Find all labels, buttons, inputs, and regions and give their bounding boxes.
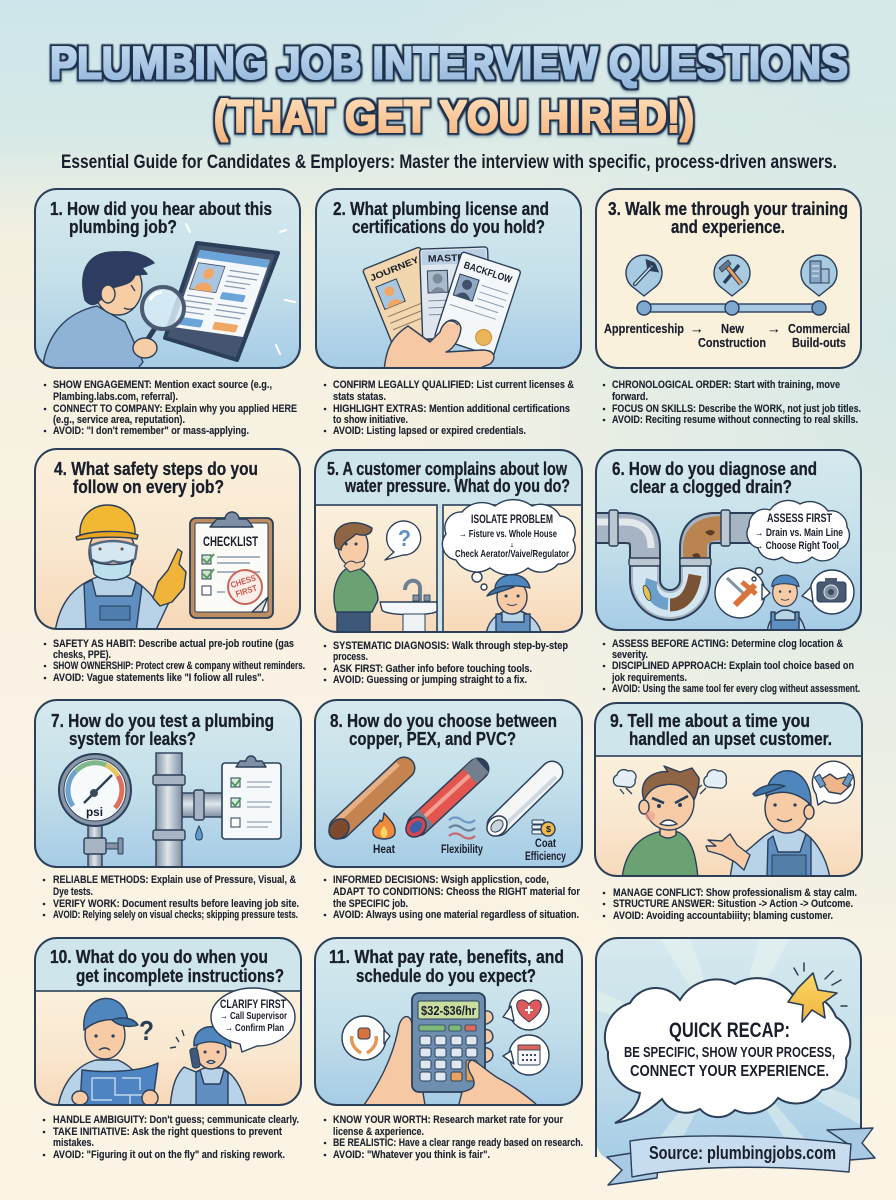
tips 7: RELIABLE METHODS: Explain use of Pressure, Visual, & bbox=[53, 874, 296, 886]
tips 2: stats statas. bbox=[333, 391, 386, 403]
icon: heat flame bbox=[373, 813, 395, 839]
icon: hammer and wrench bbox=[714, 255, 750, 296]
icon: copper pipe bbox=[325, 764, 404, 843]
thought cloud: isolate problem: ISOLATE PROBLEM bbox=[471, 512, 553, 526]
illustration: candidate with magnifier and tablet bbox=[42, 224, 295, 372]
recap message: BE SPECIFIC, SHOW YOUR PROCESS, bbox=[624, 1044, 835, 1061]
illustration: tee pipe with leak bbox=[153, 753, 224, 873]
tips 4: chesks, PPE). bbox=[53, 649, 111, 661]
heading 3 bbox=[608, 198, 848, 237]
tips 3 bbox=[603, 379, 861, 426]
panel 5: low water pressure bbox=[315, 450, 583, 686]
icon: camera bubble bbox=[802, 570, 854, 614]
icon: PVC pipe bbox=[483, 772, 556, 840]
tips 5: SYSTEMATIC DIAGNOSIS: Walk through step-by-step bbox=[333, 640, 568, 652]
thought cloud: isolate problem: Check Aerator/Vaive/Regulator bbox=[455, 549, 569, 560]
icon: coins bbox=[532, 820, 555, 836]
timeline labels: Build-outs bbox=[792, 335, 846, 350]
scene: confused customer at sink: ? bbox=[398, 525, 411, 551]
tips 7: AVOID: Relying selely on visual checks; skipping pressure tests. bbox=[53, 909, 298, 921]
heading 10 bbox=[50, 946, 284, 986]
icon: schedule calendar bubble bbox=[503, 1035, 549, 1075]
heading 7 bbox=[51, 710, 274, 749]
heading 5: 5. A customer complains about low bbox=[327, 458, 567, 479]
icon: coins: $ bbox=[546, 825, 552, 834]
heading 6 bbox=[612, 458, 817, 497]
heading 2: certifications do you hold? bbox=[352, 216, 545, 237]
tips 11: BE REALISTIC: Have a clear range ready based on research. bbox=[333, 1137, 583, 1149]
panel 12: quick recap bbox=[596, 938, 875, 1185]
illustration: p-trap pipe with clog bbox=[590, 510, 760, 605]
ribbon: source bbox=[607, 1128, 875, 1185]
illustration: hand holding calculator: $32-$36/hr bbox=[421, 1003, 476, 1018]
tips 4 bbox=[44, 638, 305, 684]
panel 7: leak testing bbox=[35, 700, 301, 921]
tips 6 bbox=[603, 638, 860, 695]
icon: checklist clipboard: CHESS bbox=[229, 572, 257, 590]
panel 3: training and experience timeline bbox=[596, 189, 861, 426]
speech bubble: clarify first: CLARIFY FIRST bbox=[220, 997, 286, 1011]
tips 4: SHOW OWNERSHIP: Protect crew & company witheut reminders. bbox=[53, 660, 305, 672]
figure: plumber bbox=[752, 568, 806, 634]
heading 6: clear a clogged drain? bbox=[630, 476, 792, 497]
heading 11: 11. What pay rate, benefits, and bbox=[329, 946, 564, 967]
heading 1 bbox=[50, 198, 272, 237]
heading 1: plumbing job? bbox=[69, 216, 177, 237]
figure: plumber on phone bbox=[170, 1027, 247, 1108]
panel 6: clogged drain bbox=[590, 450, 861, 695]
tips 1 bbox=[44, 379, 297, 437]
icons: anger puffs bbox=[613, 770, 726, 794]
heading 9: handled an upset customer. bbox=[629, 728, 832, 749]
thought cloud: assess first: → Choose Right Tool bbox=[755, 540, 839, 552]
title: (THAT GET YOU HIRED!) bbox=[214, 91, 694, 142]
tips 10: TAKE INITIATIVE: Ask the right questions to prevent bbox=[53, 1126, 282, 1138]
heading 1: 1. How did you hear about this bbox=[50, 198, 272, 219]
tips 1: AVOID: "I don't remember" or mass-applying. bbox=[53, 425, 249, 437]
tips 1: Plambing.labs.com, referral). bbox=[53, 391, 178, 403]
thought cloud: assess first: → Drain vs. Main Line bbox=[755, 527, 843, 539]
label: cost efficiency: Coat bbox=[535, 838, 556, 850]
heading 9: 9. Tell me about a time you bbox=[610, 710, 810, 731]
tips 8 bbox=[324, 874, 580, 921]
tips 7: Dye tests. bbox=[53, 886, 93, 898]
tips 6: severity. bbox=[612, 649, 648, 661]
tips 5: process. bbox=[333, 651, 368, 663]
heading 8: copper, PEX, and PVC? bbox=[349, 728, 516, 749]
heading 7: 7. How do you test a plumbing bbox=[51, 710, 274, 731]
recap heading: QUICK RECAP: bbox=[669, 1019, 790, 1042]
tips 11: KNOW YOUR WORTH: Research market rate for your bbox=[333, 1114, 563, 1126]
scene: confused customer at sink bbox=[315, 505, 437, 634]
heading 8: 8. How do you choose between bbox=[330, 710, 557, 731]
panel 4: safety steps bbox=[35, 449, 305, 684]
tips 3: forward. bbox=[612, 391, 648, 403]
illustration: hand holding license cards: BACKFLOW bbox=[462, 260, 514, 286]
heading 6: 6. How do you diagnose and bbox=[612, 458, 817, 479]
label: flexibility: Flexibility bbox=[441, 844, 483, 856]
label: heat: Heat bbox=[373, 844, 395, 856]
tips 6: jok requirements. bbox=[611, 672, 687, 684]
thought cloud: assess first: ASSESS FIRST bbox=[767, 511, 832, 525]
icon: star bbox=[788, 963, 847, 1022]
panel 11: pay rate and benefits bbox=[315, 938, 583, 1161]
timeline labels: Commercial bbox=[788, 321, 850, 336]
timeline chart bbox=[604, 255, 850, 350]
icon: buildings bbox=[801, 255, 837, 296]
thought cloud: isolate problem bbox=[442, 500, 575, 575]
timeline labels: New bbox=[721, 321, 745, 336]
icon: checklist clipboard bbox=[190, 512, 273, 618]
speech bubble: clarify first bbox=[211, 988, 295, 1052]
icon: benefits hands bubble bbox=[342, 1016, 390, 1060]
panel 9: upset customer bbox=[595, 703, 862, 922]
tips 9: AVOID: Avoiding accountabiiity; blaming customer. bbox=[613, 910, 833, 922]
illustration: hand holding calculator bbox=[362, 993, 540, 1108]
heading 4 bbox=[54, 458, 258, 497]
tips 10 bbox=[43, 1114, 299, 1161]
heading 10: get incomplete instructions? bbox=[76, 965, 284, 986]
heading 3: 3. Walk me through your training bbox=[608, 198, 848, 219]
tips 8: AVOID: Always using one material regardless of situation. bbox=[333, 909, 579, 921]
title bbox=[50, 38, 848, 142]
timeline labels: Construction bbox=[698, 335, 766, 350]
recap message: CONNECT YOUR EXPERIENCE. bbox=[630, 1063, 829, 1080]
illustration: hand holding license cards: MASTER bbox=[428, 252, 472, 265]
heading 5: water pressure. What do you do? bbox=[344, 475, 570, 496]
icon: inspection clipboard bbox=[222, 756, 281, 839]
heading 5 bbox=[327, 458, 570, 496]
heading 9 bbox=[610, 710, 832, 749]
heading 11 bbox=[329, 946, 564, 986]
icon: checklist clipboard: CHECKLIST bbox=[203, 534, 259, 549]
icon: flexibility waves bbox=[449, 818, 475, 838]
icon: checklist clipboard: FIRST bbox=[234, 582, 259, 599]
speech bubble: clarify first: → Confirm Plan bbox=[225, 1022, 284, 1034]
tips 8: the SPECIFIC job. bbox=[333, 898, 408, 910]
heading 11: schedule do you expect? bbox=[356, 965, 536, 986]
tips 2: CONFIRM LEGALLY QUALIFIED: List current licenses & bbox=[333, 379, 574, 391]
tips 5 bbox=[324, 640, 568, 686]
tips 1: (e.g., service area, reputation). bbox=[53, 414, 185, 426]
figure: angry customer bbox=[622, 766, 699, 878]
panel 2: licenses and certifications bbox=[316, 189, 581, 437]
tips 10: HANDLE AMBIGUITY: Don't guess; cemmunicate clearly. bbox=[53, 1114, 299, 1126]
heading 2 bbox=[333, 198, 549, 237]
scene: plumber thinking bbox=[442, 500, 583, 635]
icon: wrench bubble bbox=[715, 568, 770, 618]
tips 5: AVOID: Guessing or jumping straight to a fix. bbox=[333, 674, 527, 686]
speech cloud: recap message bbox=[605, 978, 850, 1123]
tips 2: to show initiative. bbox=[333, 414, 408, 426]
ribbon: source: Source: plumbingjobs.com bbox=[649, 1143, 836, 1163]
illustration: hand holding license cards: JOURNEY bbox=[368, 254, 420, 283]
tips 11: license & axperience. bbox=[333, 1126, 424, 1138]
tips 8: ADAPT TO CONDITIONS: Cheoss the RIGHT material for bbox=[333, 886, 580, 898]
panel 10: incomplete instructions bbox=[35, 938, 301, 1161]
heading 2: 2. What plumbing license and bbox=[333, 198, 549, 219]
illustration: worker in hard hat pointing bbox=[55, 505, 186, 632]
icon: pressure gauge: psi bbox=[86, 805, 103, 819]
speech bubble: clarify first: → Call Supervisor bbox=[220, 1010, 287, 1022]
icon: PEX pipe bbox=[402, 765, 482, 841]
tips 10: AVOID: "Figuring it out on the fly" and risking rework. bbox=[53, 1149, 285, 1161]
panel 8: copper, PEX, PVC bbox=[315, 700, 582, 921]
tips 7: VERIFY WORK: Document results before leaving job site. bbox=[53, 898, 299, 910]
panel 1: how did you hear bbox=[35, 189, 300, 437]
heading 4: 4. What safety steps do you bbox=[54, 458, 258, 479]
timeline labels: → bbox=[690, 321, 704, 336]
heading 10: 10. What do you do when you bbox=[50, 946, 268, 967]
heading 3: and experience. bbox=[671, 216, 785, 237]
figure: calm plumber bbox=[706, 771, 830, 878]
tips 4: AVOID: Vague statements like "I foliow all rules". bbox=[53, 672, 264, 684]
tips 2 bbox=[324, 379, 574, 437]
timeline labels: Apprenticeship bbox=[604, 321, 684, 336]
heading 8 bbox=[330, 710, 557, 749]
label: cost efficiency bbox=[525, 838, 566, 863]
tips 2: AVOID: Listing lapsed or expired credentials. bbox=[333, 425, 526, 437]
tips 4: SAFETY AS HABIT: Describe actual pre-job routine (gas bbox=[53, 638, 294, 650]
illustration: hand holding license cards bbox=[362, 247, 521, 372]
tips 1: CONNECT TO COMPANY: Explain why you applied HERE bbox=[53, 403, 297, 415]
icon: wrench bbox=[626, 255, 662, 296]
tips 3: CHRONOLOGICAL ORDER: Start with training, move bbox=[612, 379, 840, 391]
tips 7 bbox=[43, 874, 299, 921]
thought cloud: assess first bbox=[747, 501, 849, 563]
label: cost efficiency: Efficiency bbox=[525, 851, 566, 863]
tips 1: SHOW ENGAGEMENT: Mention exact source (e.g., bbox=[53, 379, 272, 391]
heading 7: system for leaks? bbox=[69, 728, 196, 749]
tips 10: mistakes. bbox=[53, 1137, 94, 1149]
thought cloud: isolate problem: ↓ bbox=[509, 542, 515, 549]
tips 11: AVOID: "Whatever you think is fair". bbox=[333, 1149, 490, 1161]
figure: plumber with blueprint bbox=[58, 998, 158, 1108]
tips 9 bbox=[603, 887, 857, 922]
tips 8: INFORMED DECISIONS: Wsigh applicstion, code, bbox=[333, 874, 549, 886]
icon: question mark: ? bbox=[139, 1015, 154, 1046]
recap message bbox=[624, 1044, 835, 1080]
icon: handshake bubble bbox=[812, 761, 854, 805]
icon: pressure gauge bbox=[59, 754, 131, 872]
tips 2: HIGHLIGHT EXTRAS: Mention additional certifications bbox=[333, 403, 570, 415]
icon: health heart bubble bbox=[503, 990, 549, 1030]
timeline labels: → bbox=[767, 321, 781, 336]
heading 4: follow on every job? bbox=[73, 476, 224, 497]
timeline labels bbox=[604, 321, 850, 350]
tips 11 bbox=[324, 1114, 583, 1161]
tips 6: ASSESS BEFORE ACTING: Determine clog location & bbox=[612, 638, 843, 650]
tips 5: ASK FIRST: Gather info before touching tools. bbox=[333, 663, 532, 675]
thought cloud: isolate problem: → Fisture vs. Whole House bbox=[459, 528, 557, 540]
